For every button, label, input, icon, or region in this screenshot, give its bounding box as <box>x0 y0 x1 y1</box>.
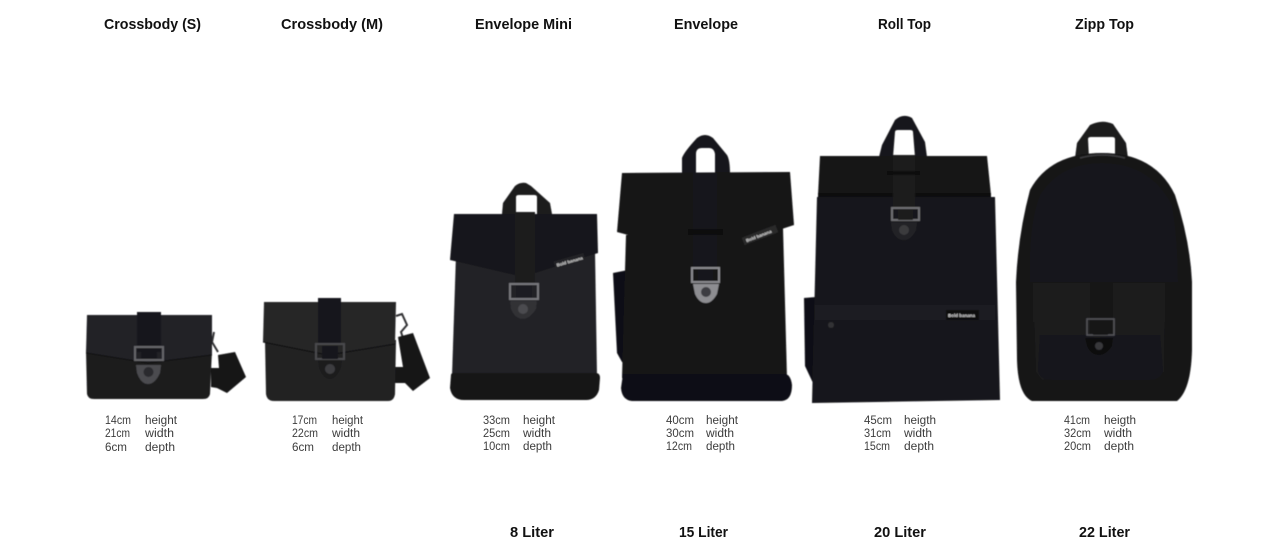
heading: Crossbody (S): Crossbody (S) <box>104 16 201 33</box>
dimensions: Envelope Mini: width <box>522 428 551 440</box>
dimensions: Crossbody S: depth <box>145 442 175 454</box>
dimensions: Crossbody M: height <box>332 415 364 427</box>
volume: 8 Liter: 8 Liter <box>510 524 554 541</box>
dimensions: Crossbody M: 6cm <box>292 442 314 454</box>
dimensions: Zipp Top: width <box>1103 428 1132 440</box>
icon: Roll Top backpack: Bold banana <box>948 313 975 318</box>
heading: Roll Top: Roll Top <box>878 16 931 33</box>
icon: Roll Top backpack <box>804 116 1000 403</box>
dimensions: Crossbody M: width <box>331 428 360 440</box>
dimensions: Crossbody M: 22cm <box>292 428 318 440</box>
dimensions: Crossbody M <box>292 415 364 454</box>
dimensions: Crossbody S: 14cm <box>105 415 131 427</box>
volume: 20 Liter: 20 Liter <box>874 524 926 541</box>
dimensions: Roll Top: 45cm <box>864 415 892 427</box>
volume: 15 Liter: 15 Liter <box>679 524 728 541</box>
heading: Crossbody (M): Crossbody (M) <box>281 16 383 33</box>
heading: Envelope Mini: Envelope Mini <box>475 16 572 33</box>
icon: Crossbody M bag <box>263 298 430 401</box>
icon: Zipp Top backpack <box>1016 122 1192 401</box>
dimensions: Envelope: 40cm <box>666 415 694 427</box>
dimensions: Zipp Top: 20cm <box>1064 441 1091 453</box>
dimensions: Crossbody S: width <box>144 428 174 440</box>
dimensions: Roll Top <box>864 415 936 453</box>
dimensions: Roll Top: 15cm <box>864 441 890 453</box>
volume labels row <box>510 524 1130 541</box>
dimensions: Zipp Top: depth <box>1104 441 1134 453</box>
dimensions: Envelope Mini <box>483 415 556 453</box>
volume: 22 Liter: 22 Liter <box>1079 524 1130 541</box>
dimensions: Crossbody M: 17cm <box>292 415 317 427</box>
dimensions: Zipp Top <box>1064 415 1136 453</box>
dimensions: Envelope: 30cm <box>666 428 694 440</box>
heading: Zipp Top: Zipp Top <box>1075 16 1134 33</box>
dimensions: Roll Top: heigth <box>904 415 936 427</box>
headings row <box>104 16 1134 33</box>
dimensions: Crossbody S <box>105 415 178 454</box>
dimensions: Envelope Mini: 10cm <box>483 441 510 453</box>
dimensions: Zipp Top: heigth <box>1104 415 1136 427</box>
dimensions: Crossbody S: height <box>145 415 178 427</box>
dimensions: Roll Top: width <box>903 428 932 440</box>
dimensions: Envelope: 12cm <box>666 441 692 453</box>
dimensions: Roll Top: depth <box>904 441 934 453</box>
icon: Envelope Mini backpack <box>450 183 600 400</box>
dimensions: Envelope: height <box>706 415 739 427</box>
dimensions: Crossbody S: 6cm <box>105 442 127 454</box>
dimensions: Envelope Mini: 33cm <box>483 415 510 427</box>
dimensions: Roll Top: 31cm <box>864 428 891 440</box>
dimensions: Zipp Top: 41cm <box>1064 415 1090 427</box>
dimensions: Crossbody M: depth <box>332 442 361 454</box>
dimensions: Envelope Mini: 25cm <box>483 428 510 440</box>
dimensions: Envelope Mini: height <box>523 415 556 427</box>
icon: Envelope backpack <box>613 135 794 401</box>
heading: Envelope: Envelope <box>674 16 738 33</box>
dimensions: Crossbody S: 21cm <box>105 428 130 440</box>
icon: Crossbody S bag <box>86 312 246 399</box>
dimensions: Envelope: width <box>705 428 734 440</box>
dimensions: Envelope <box>666 415 739 453</box>
dimensions: Zipp Top: 32cm <box>1064 428 1091 440</box>
icon: Envelope Mini backpack: Bold banana <box>556 255 584 268</box>
dimensions: Envelope: depth <box>706 441 735 453</box>
dimensions: Envelope Mini: depth <box>523 441 552 453</box>
icon: Envelope backpack: Bold banana <box>745 229 773 243</box>
